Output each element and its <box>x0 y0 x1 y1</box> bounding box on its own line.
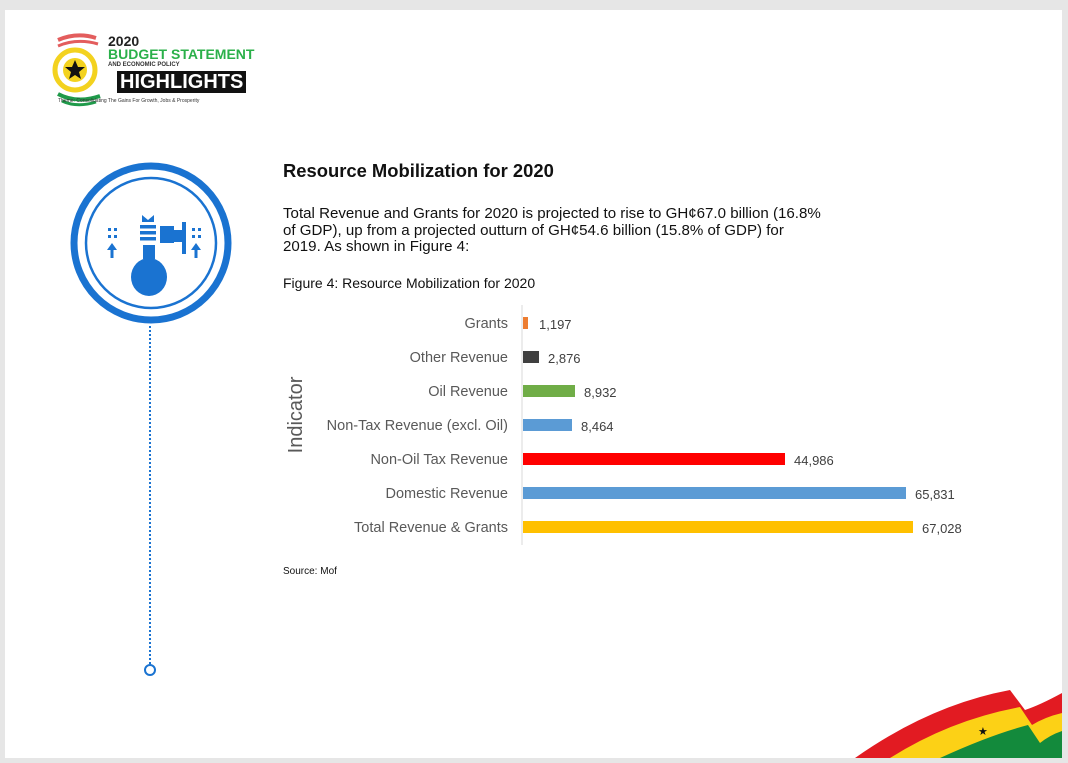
bar chart: 1,197 <box>539 317 572 332</box>
bar chart: Non-Tax Revenue (excl. Oil) <box>327 418 508 434</box>
icon: money bag circle <box>70 162 232 324</box>
intro text: 2019. As shown in Figure 4: <box>283 238 469 255</box>
bar chart: Total Revenue & Grants <box>354 520 508 536</box>
bar chart: 65,831 <box>915 487 955 502</box>
dotted timeline <box>149 326 151 664</box>
bar chart <box>285 305 962 545</box>
title: Resource Mobilization for 2020 <box>283 160 554 181</box>
flag decoration: ★ <box>978 726 988 738</box>
timeline end circle <box>144 664 156 676</box>
logo: 2020 <box>108 33 139 49</box>
bar chart: Other Revenue <box>410 350 508 366</box>
bar chart: 8,932 <box>584 385 617 400</box>
bar chart: 2,876 <box>548 351 581 366</box>
intro text: Total Revenue and Grants for 2020 is projected to rise to GH¢67.0 billion (16.8% <box>283 205 821 222</box>
bar chart: Oil Revenue <box>428 384 508 400</box>
bar chart: Grants <box>464 316 508 332</box>
bar chart: 67,028 <box>922 521 962 536</box>
bar chart: Indicator <box>285 376 307 453</box>
logo: BUDGET STATEMENT <box>108 46 254 62</box>
figure caption: Figure 4: Resource Mobilization for 2020 <box>283 275 535 291</box>
bar chart: Non-Oil Tax Revenue <box>370 452 508 468</box>
intro text <box>283 205 821 255</box>
source: Source: Mof <box>283 566 337 577</box>
logo: HIGHLIGHTS <box>120 71 243 93</box>
bar chart: 44,986 <box>794 453 834 468</box>
logo: AND ECONOMIC POLICY <box>108 62 180 68</box>
bar chart: Domestic Revenue <box>386 486 508 502</box>
intro text: of GDP), up from a projected outturn of GH¢54.6 billion (15.8% of GDP) for <box>283 222 784 238</box>
bar chart: 8,464 <box>581 419 614 434</box>
flag decoration <box>855 690 1062 758</box>
logo: Theme: Consolidating The Gains For Growth, Jobs & Prosperity <box>58 98 199 104</box>
logo <box>52 33 254 106</box>
